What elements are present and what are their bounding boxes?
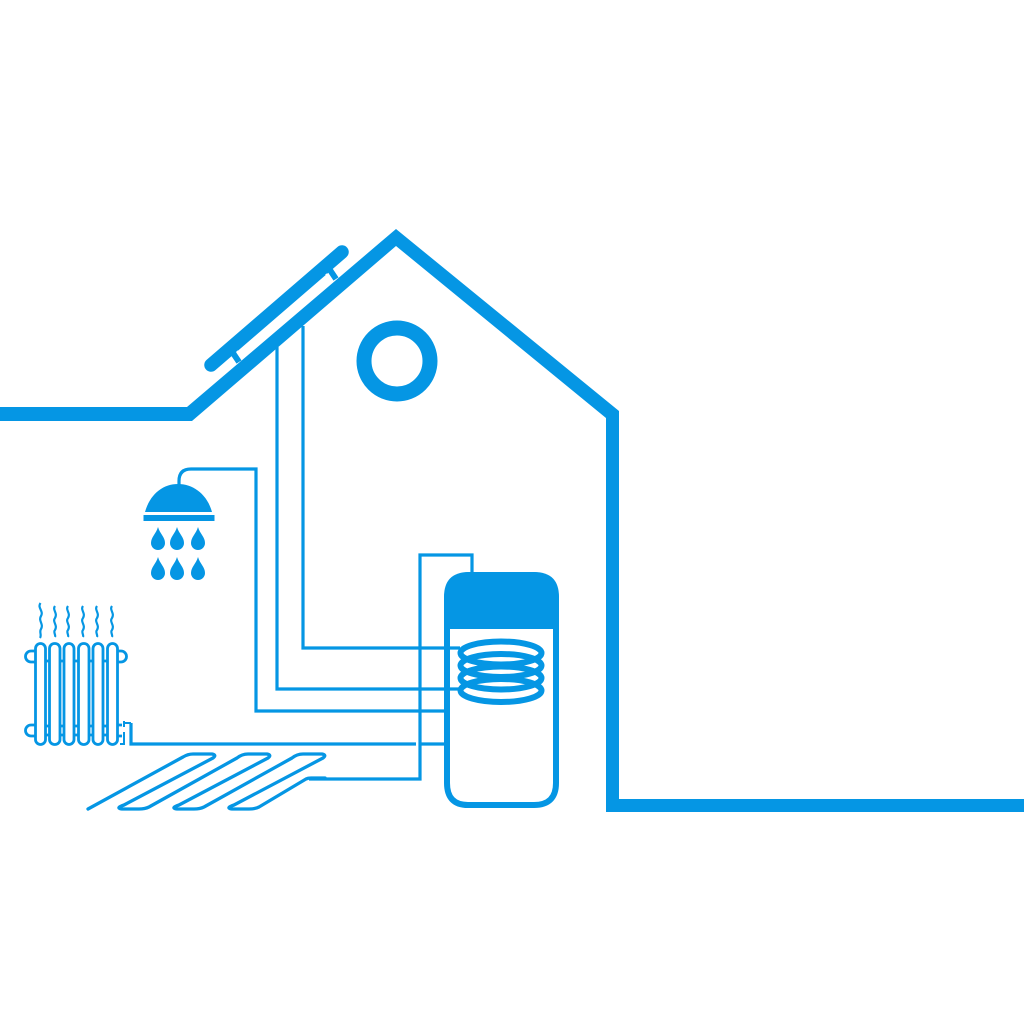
tank top fill <box>444 572 559 629</box>
radiator <box>26 603 131 744</box>
tank body <box>447 575 556 805</box>
radiator columns <box>36 644 46 744</box>
heat exchanger coil <box>460 642 542 702</box>
underfloor heating coil <box>88 754 325 809</box>
hot water tank <box>444 572 559 805</box>
shower <box>144 484 214 580</box>
round attic window <box>364 328 430 394</box>
pipes <box>131 326 472 779</box>
water drops <box>151 527 205 580</box>
connecting tubes <box>26 651 127 662</box>
solar panel <box>211 252 342 365</box>
radiator valve <box>120 721 131 744</box>
shower head <box>145 484 212 512</box>
shower bar <box>144 515 214 521</box>
coil pipe stubs <box>450 648 460 689</box>
house outline <box>0 229 1024 812</box>
heat waves <box>39 603 113 638</box>
